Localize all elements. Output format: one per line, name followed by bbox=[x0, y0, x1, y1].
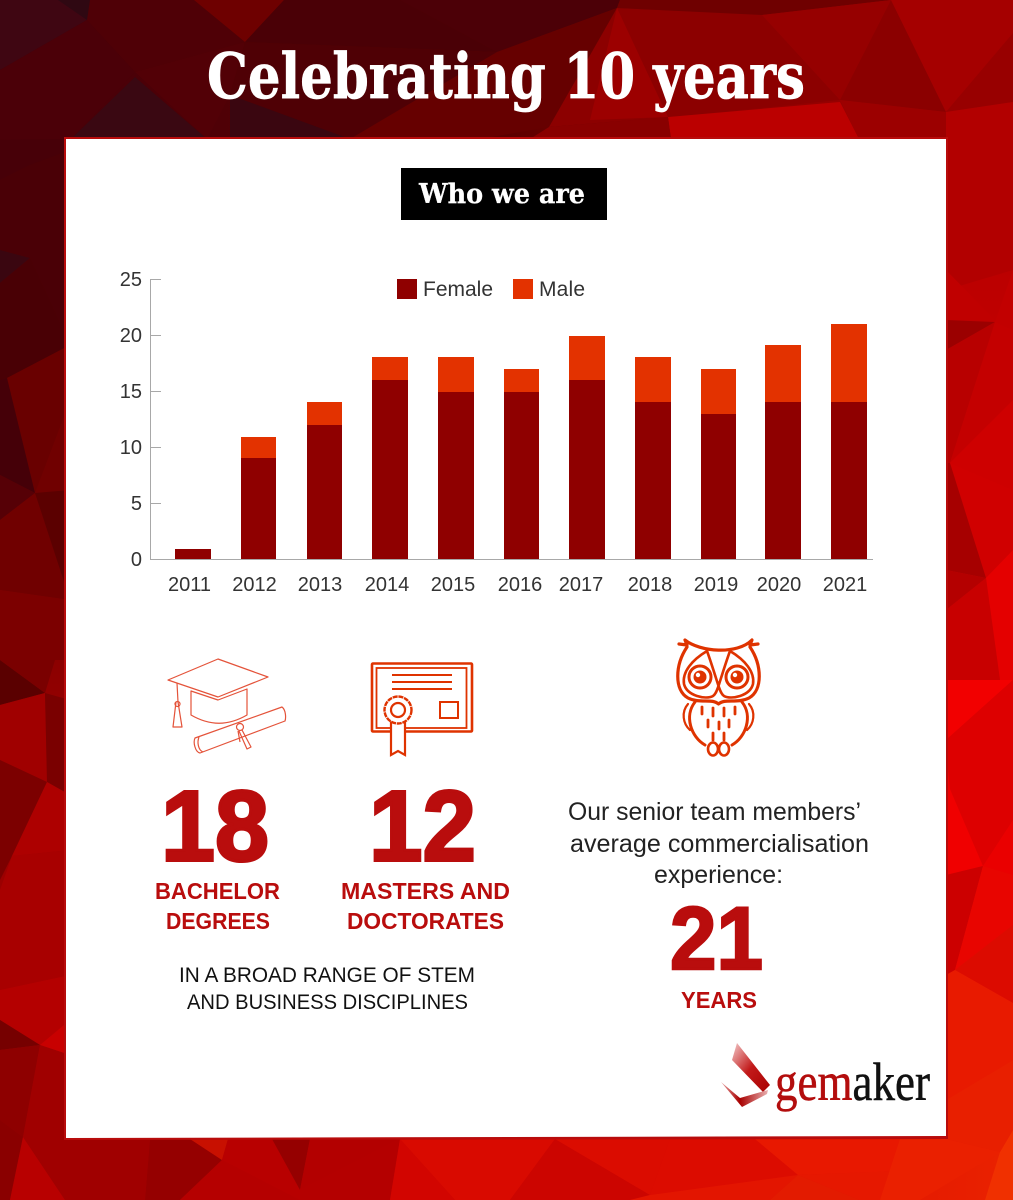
text: broad range of disciplines bbox=[179, 964, 475, 1014]
stat: 12 masters and doctorates: MASTERS AND bbox=[341, 878, 510, 904]
logo: gemaker: gemaker bbox=[775, 1052, 930, 1112]
stacked bar chart: Female and Male by year: 2019 bbox=[694, 574, 738, 596]
stat: 18 bachelor degrees: 18 bbox=[161, 770, 269, 882]
stacked bar chart: Female and Male by year: 2017 bbox=[559, 574, 603, 596]
stat: 18 bachelor degrees: BACHELOR bbox=[155, 878, 280, 904]
stacked bar chart: Female and Male by year: 20 bbox=[120, 325, 142, 347]
stat: 12 masters and doctorates: DOCTORATES bbox=[347, 908, 504, 934]
text: broad range of disciplines: IN A BROAD RANGE OF STEM bbox=[179, 964, 475, 987]
stat: 12 masters and doctorates bbox=[341, 770, 510, 934]
stacked bar chart: Female and Male by year: 2014 bbox=[365, 574, 409, 596]
stat: 18 bachelor degrees: DEGREES bbox=[166, 908, 270, 934]
stacked bar chart: Female and Male by year: 2018 bbox=[628, 574, 672, 596]
text: senior team experience: experience: bbox=[654, 861, 783, 889]
stat: 21 years: YEARS bbox=[681, 987, 757, 1013]
stat: 12 masters and doctorates: 12 bbox=[369, 770, 476, 882]
text: broad range of disciplines: AND BUSINESS DISCIPLINES bbox=[187, 991, 468, 1014]
icon: certificate with rosette bbox=[372, 664, 472, 755]
stat: 18 bachelor degrees bbox=[155, 770, 280, 934]
stacked bar chart: Female and Male by year bbox=[120, 269, 873, 596]
stacked bar chart: Female and Male by year: 2012 bbox=[232, 574, 277, 596]
stacked bar chart: Female and Male by year: 25 bbox=[120, 269, 142, 291]
stacked bar chart: Female and Male by year: 2016 bbox=[498, 574, 542, 596]
stacked bar chart: Female and Male by year: 5 bbox=[131, 493, 142, 515]
stacked bar chart: Female and Male by year: 0 bbox=[131, 549, 142, 571]
text: senior team experience: average commercialisation bbox=[570, 830, 869, 858]
icon: owl bbox=[678, 640, 759, 756]
text: senior team experience bbox=[568, 798, 869, 889]
heading badge: Who we are bbox=[401, 168, 607, 220]
stacked bar chart: Female and Male by year: 2011 bbox=[168, 574, 211, 596]
stacked bar chart: Female and Male by year: 2013 bbox=[298, 574, 342, 596]
stacked bar chart: Female and Male by year: 2015 bbox=[431, 574, 475, 596]
stacked bar chart: Female and Male by year: Female bbox=[423, 278, 493, 301]
white content panel bbox=[64, 137, 948, 1140]
stacked bar chart: Female and Male by year: 10 bbox=[120, 437, 142, 459]
logo: gemaker bbox=[721, 1043, 930, 1112]
text: senior team experience: Our senior team members’ bbox=[568, 798, 861, 826]
stacked bar chart: Female and Male by year: Male bbox=[539, 278, 585, 301]
icon: graduation cap and diploma bbox=[168, 659, 286, 753]
stacked bar chart: Female and Male by year: 15 bbox=[120, 381, 142, 403]
stacked bar chart: Female and Male by year: 2021 bbox=[823, 574, 867, 596]
heading badge: Who we are: Who we are bbox=[418, 179, 585, 210]
stat: 21 years: 21 bbox=[670, 888, 763, 988]
title: Celebrating 10 years bbox=[207, 39, 805, 113]
stacked bar chart: Female and Male by year: 2020 bbox=[757, 574, 801, 596]
